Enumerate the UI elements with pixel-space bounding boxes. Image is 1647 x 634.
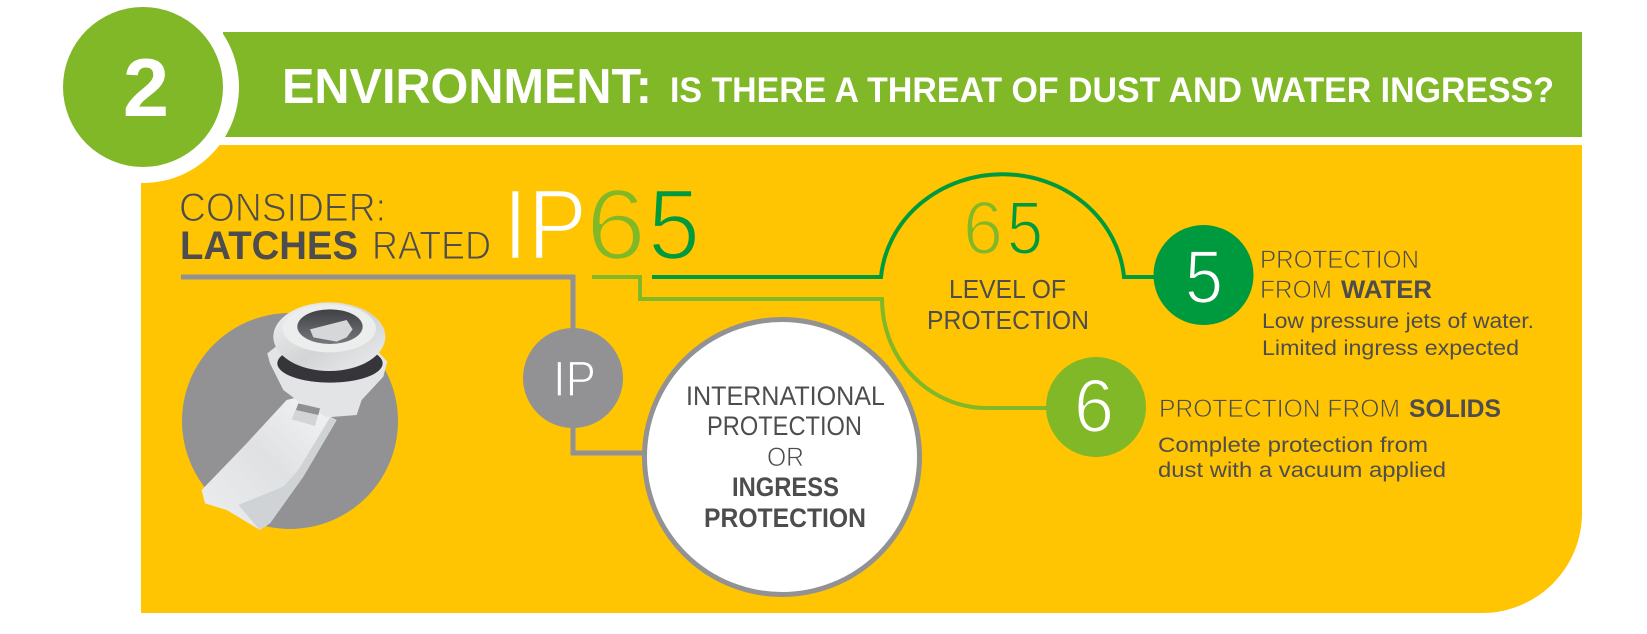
- solids protection text: PROTECTION FROM: [1159, 395, 1400, 423]
- water protection text: PROTECTION: [1260, 246, 1419, 274]
- heading: ENVIRONMENT:: [282, 60, 652, 114]
- heading: IS THERE A THREAT OF DUST AND WATER INGRESS?: [670, 71, 1554, 110]
- IP65 rating: 6: [586, 169, 646, 281]
- level of protection: [927, 186, 1089, 335]
- definition circle: PROTECTION: [704, 503, 866, 533]
- water protection text: WATER: [1341, 276, 1432, 304]
- solids protection text: Complete protection from: [1158, 434, 1428, 457]
- circle: 6 solids: 6: [1074, 364, 1114, 448]
- definition circle: INGRESS: [732, 472, 839, 502]
- water protection text: [1260, 246, 1534, 360]
- solids protection text: SOLIDS: [1409, 395, 1501, 423]
- header banner: [223, 32, 1582, 137]
- IP circle: IP: [553, 351, 596, 407]
- definition circle: OR: [767, 442, 804, 472]
- water protection text: Low pressure jets of water.: [1262, 310, 1534, 333]
- grey connector: [181, 277, 643, 453]
- IP65 rating: [503, 169, 700, 281]
- water protection text: Limited ingress expected: [1262, 337, 1519, 360]
- heading: [282, 60, 1554, 114]
- number badge: 2: [123, 41, 169, 134]
- definition circle: INTERNATIONAL: [686, 381, 885, 411]
- IP65 rating: IP: [503, 169, 587, 281]
- IP circle: [523, 328, 623, 428]
- water protection text: FROM: [1260, 276, 1332, 304]
- light green connector: [592, 277, 1050, 408]
- solids protection text: dust with a vacuum applied: [1158, 459, 1446, 482]
- dark green connector: [652, 174, 1158, 277]
- consider text: LATCHES: [180, 224, 358, 268]
- circle: 6 solids: [1046, 357, 1146, 457]
- level of protection: 6: [963, 186, 1003, 270]
- level of protection: PROTECTION: [927, 305, 1089, 335]
- consider text: [179, 186, 491, 268]
- circle: 5 water: [1154, 225, 1254, 325]
- level of protection: 5: [1007, 186, 1043, 270]
- consider text: RATED: [372, 224, 491, 268]
- definition circle: [644, 320, 920, 594]
- latch illustration: [202, 302, 387, 530]
- level of protection: LEVEL OF: [949, 274, 1066, 304]
- IP65 rating: 5: [648, 169, 700, 281]
- number badge: [47, 0, 239, 183]
- consider text: CONSIDER:: [179, 186, 386, 230]
- solids protection text: [1158, 395, 1501, 482]
- circle: 5 water: 5: [1185, 235, 1223, 319]
- yellow panel: [141, 145, 1582, 613]
- definition circle: PROTECTION: [707, 411, 862, 441]
- latch photo: [182, 302, 398, 530]
